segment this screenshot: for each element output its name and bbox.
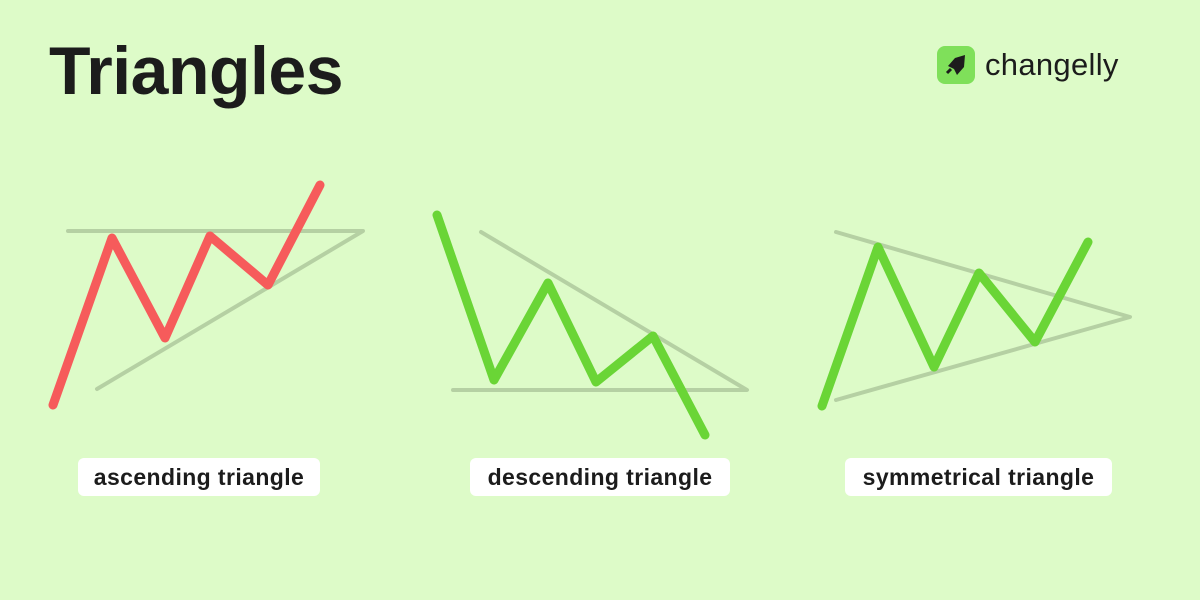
icon: rocket [937, 46, 975, 84]
logo [937, 46, 1119, 84]
label: symmetrical [845, 458, 1112, 496]
label: ascending: ascending triangle [94, 464, 304, 490]
label: descending [470, 458, 730, 496]
label: ascending [78, 458, 320, 496]
brand name: changelly [985, 47, 1119, 82]
chart: symmetrical [822, 232, 1130, 406]
chart: ascending [53, 185, 363, 405]
label: descending: descending triangle [488, 464, 712, 490]
label: symmetrical: symmetrical triangle [863, 464, 1094, 490]
title: Triangles [49, 33, 343, 109]
chart: descending [437, 215, 747, 435]
